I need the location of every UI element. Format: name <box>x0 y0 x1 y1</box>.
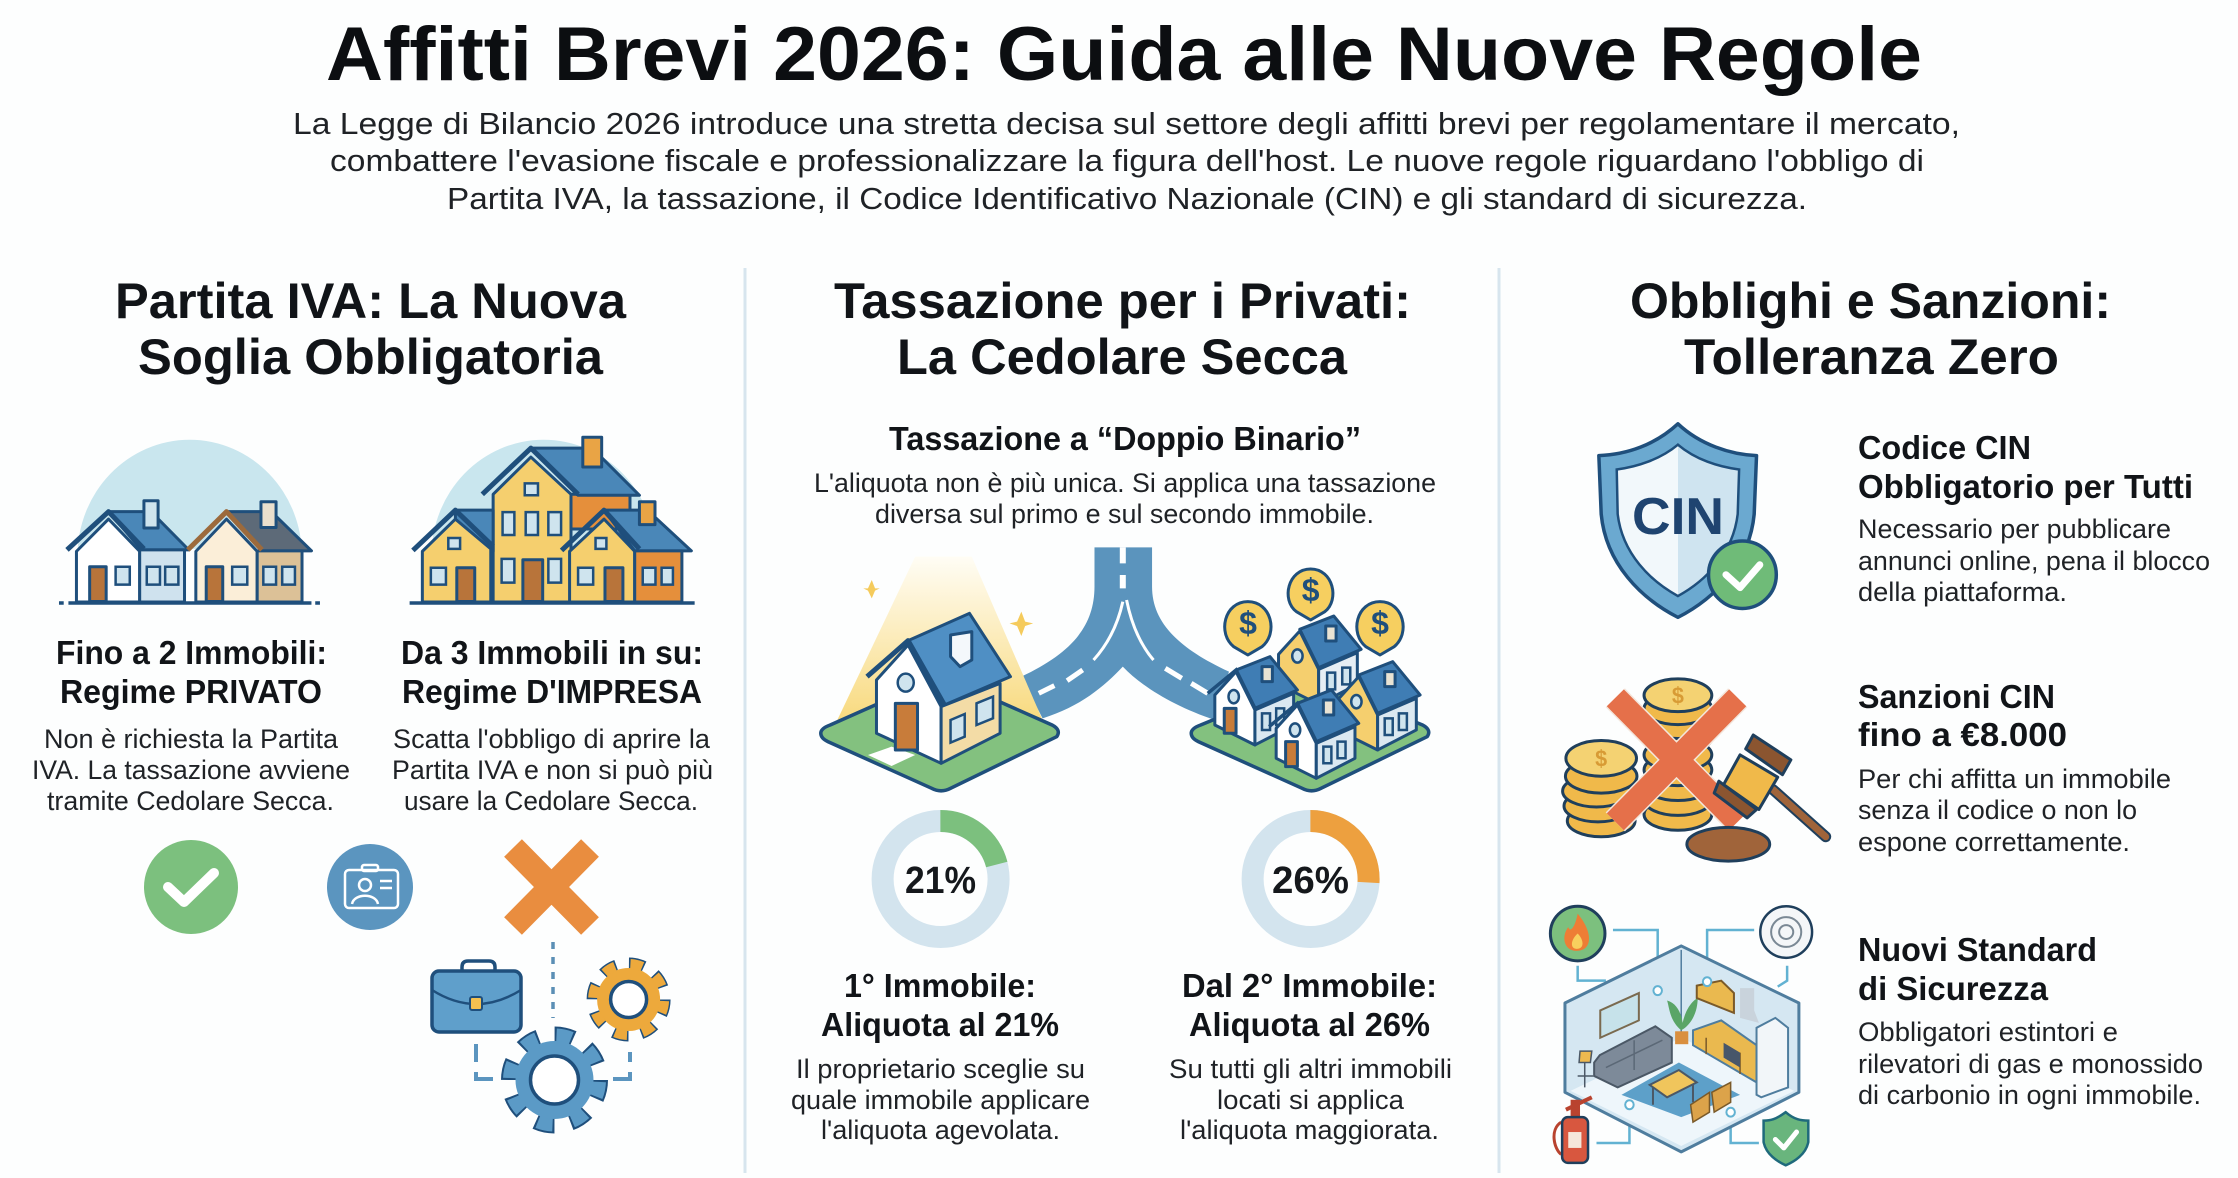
icon: coin symbols: $ <box>1371 605 1389 641</box>
text: aliquota 26: Su tutti gli altri immobili <box>1169 1054 1452 1084</box>
icon: safety room <box>1550 906 1812 1165</box>
text: aliquota 26: Dal 2° Immobile: <box>1182 967 1437 1004</box>
text: regime d'impresa: Scatta l'obbligo di aprire la <box>393 724 711 754</box>
intro text: combattere l'evasione fiscale e professionalizzare la figura dell'host. Le nuove regole riguardano l'obbligo di <box>330 143 1924 178</box>
panel: partita IVA <box>32 273 713 1125</box>
icon: CIN shield: CIN <box>1632 488 1724 546</box>
icon: coin symbols: $ <box>1239 605 1257 641</box>
text: sanzioni <box>1858 678 2171 857</box>
icon: briefcase and gears <box>432 942 664 1125</box>
icon: orange x <box>513 848 590 926</box>
text: sicurezza: rilevatori di gas e monossido <box>1858 1049 2203 1079</box>
text: regime d'impresa: usare la Cedolare Secca. <box>404 786 698 816</box>
icon: green check <box>144 840 238 934</box>
text: regime privato: Fino a 2 Immobili: <box>56 634 327 671</box>
text: aliquota 21: l'aliquota agevolata. <box>821 1115 1060 1145</box>
icon: apartment houses <box>410 436 695 605</box>
icon: CIN shield <box>1599 424 1776 617</box>
text: regime d'impresa: Regime D'IMPRESA <box>402 673 702 710</box>
icon: coins and gavel: $ <box>1672 683 1685 709</box>
text: regime privato: Regime PRIVATO <box>60 673 322 710</box>
text: doppio binario: Tassazione a “Doppio Binario” <box>889 420 1361 457</box>
intro text: Partita IVA, la tassazione, il Codice Identificativo Nazionale (CIN) e gli standard di sicurezza. <box>447 181 1807 216</box>
icon: single house <box>821 557 1058 791</box>
heading: partita IVA: Soglia Obbligatoria <box>138 329 604 385</box>
heading: partita IVA: Partita IVA: La Nuova <box>115 273 627 329</box>
title: Affitti Brevi 2026: Guida alle Nuove Regole <box>326 12 1922 97</box>
chart: donut 21% <box>883 821 999 937</box>
heading: obblighi <box>1630 273 2111 385</box>
text: regime d'impresa: Da 3 Immobili in su: <box>401 634 703 671</box>
text: aliquota 26: locati si applica <box>1217 1085 1405 1115</box>
text: aliquota 21: quale immobile applicare <box>791 1085 1090 1115</box>
text: sicurezza: Nuovi Standard <box>1858 931 2097 968</box>
text: aliquota 21: Aliquota al 21% <box>821 1006 1059 1043</box>
text: regime privato <box>32 634 350 816</box>
text: sicurezza: Obbligatori estintori e <box>1858 1017 2118 1047</box>
text: sanzioni: Per chi affitta un immobile <box>1858 764 2171 794</box>
text: doppio binario: L'aliquota non è più unica. Si applica una tassazione <box>814 468 1436 498</box>
icon: coins and gavel <box>1563 679 1826 861</box>
heading: tassazione: Tassazione per i Privati: <box>834 273 1411 329</box>
icon: id badge <box>327 844 413 930</box>
text: sicurezza: di carbonio in ogni immobile. <box>1858 1080 2201 1110</box>
text: sanzioni: senza il codice o non lo <box>1858 795 2137 825</box>
heading: obblighi: Obblighi e Sanzioni: <box>1630 273 2111 329</box>
text: codice CIN: Necessario per pubblicare <box>1858 514 2171 544</box>
text: codice CIN: annunci online, pena il blocco <box>1858 546 2210 576</box>
text: regime d'impresa <box>392 634 713 816</box>
text: codice CIN: Codice CIN <box>1858 429 2031 466</box>
text: aliquota 21 <box>791 967 1090 1145</box>
text: regime d'impresa: Partita IVA e non si può più <box>392 755 713 785</box>
text: regime privato: tramite Cedolare Secca. <box>47 786 334 816</box>
text: doppio binario: diversa sul primo e sul secondo immobile. <box>875 499 1374 529</box>
text: codice CIN <box>1858 429 2210 607</box>
text: regime privato: Non è richiesta la Partita <box>44 724 339 754</box>
text: sicurezza: di Sicurezza <box>1858 970 2049 1007</box>
chart: donut 26% <box>1253 821 1369 937</box>
icon: coins and gavel: $ <box>1595 746 1608 771</box>
icon: forked road <box>1021 547 1229 720</box>
text: aliquota 26: Aliquota al 26% <box>1189 1006 1430 1043</box>
chart: donut 26%: 26% <box>1272 860 1349 902</box>
heading: obblighi: Tolleranza Zero <box>1684 329 2059 385</box>
heading: tassazione <box>834 273 1411 385</box>
chart: donut 21%: 21% <box>905 860 976 902</box>
icon: multiple houses with coins <box>1191 569 1429 791</box>
icon: coin symbols <box>1239 572 1389 641</box>
text: regime privato: IVA. La tassazione avviene <box>32 755 350 785</box>
heading: partita IVA <box>115 273 627 385</box>
text: aliquota 21: Il proprietario sceglie su <box>796 1054 1085 1084</box>
text: aliquota 26 <box>1169 967 1452 1145</box>
icon: coin symbols: $ <box>1302 572 1320 608</box>
text: sanzioni: espone correttamente. <box>1858 827 2130 857</box>
heading: tassazione: La Cedolare Secca <box>897 329 1348 385</box>
text: aliquota 21: 1° Immobile: <box>844 967 1036 1004</box>
text: sanzioni: Sanzioni CIN <box>1858 678 2055 715</box>
text: aliquota 26: l'aliquota maggiorata. <box>1180 1115 1439 1145</box>
text: codice CIN: Obbligatorio per Tutti <box>1858 468 2193 505</box>
text: sanzioni: fino a €8.000 <box>1858 716 2067 753</box>
intro text <box>293 106 1960 216</box>
intro text: La Legge di Bilancio 2026 introduce una stretta decisa sul settore degli affitti brevi per regolamentare il mercato, <box>293 106 1960 141</box>
text: doppio binario <box>814 420 1436 529</box>
panel: obblighi e sanzioni <box>1550 273 2210 1165</box>
text: sicurezza <box>1858 931 2203 1110</box>
text: codice CIN: della piattaforma. <box>1858 577 2067 607</box>
icon: two houses <box>59 440 320 605</box>
panel: tassazione <box>791 273 1452 1145</box>
